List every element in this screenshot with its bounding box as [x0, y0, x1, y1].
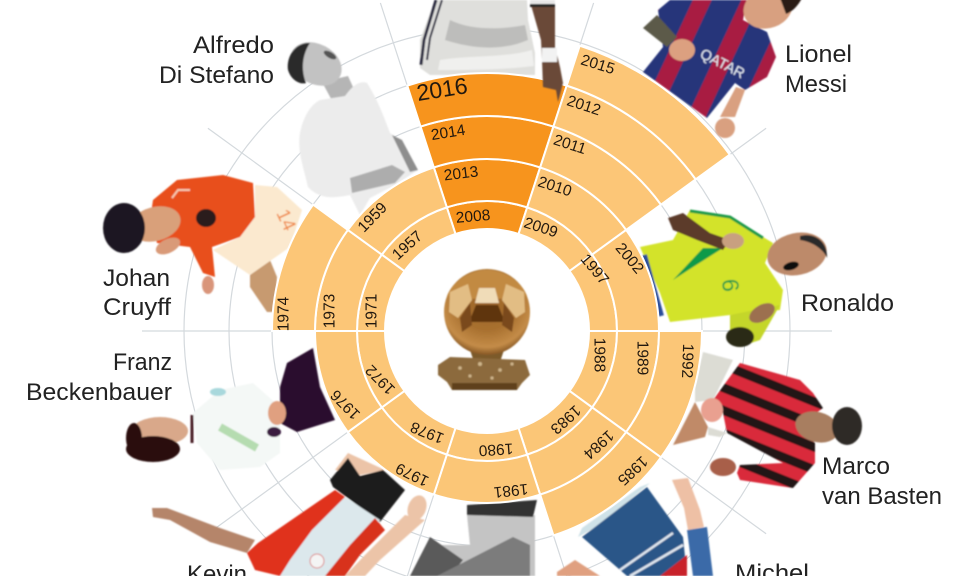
label: Franz Beckenbauer: Franz — [113, 349, 172, 376]
label: Marco van Basten: Marco — [822, 453, 890, 480]
player: Johan Cruyff — [103, 175, 302, 312]
sector: Di Stefano — [343, 161, 473, 284]
year labels: 1979 — [393, 459, 432, 489]
player: Lionel Messi: QATAR — [697, 46, 747, 82]
label: Lionel Messi: Lionel — [785, 41, 852, 68]
year labels: 1972 — [362, 361, 399, 398]
player: Marco van Basten — [673, 352, 862, 488]
label: Alfredo Di Stefano: Di Stefano — [159, 62, 274, 89]
sector: Cruyff — [262, 201, 415, 364]
label: Ronaldo: Ronaldo — [801, 290, 894, 317]
year labels: 1983 — [547, 401, 584, 437]
label: Johan Cruyff: Cruyff — [103, 294, 171, 321]
year labels: 1985 — [614, 452, 651, 488]
year labels: 2008 — [455, 207, 491, 227]
year labels: 1992 — [678, 343, 696, 378]
year labels: 2013 — [443, 163, 479, 184]
year labels: 1974 — [275, 296, 292, 331]
year labels: 1997 — [577, 251, 612, 288]
year labels: 1978 — [408, 418, 447, 446]
year labels: 2011 — [551, 132, 588, 158]
player: Johan Cruyff: 14 — [271, 206, 300, 235]
player: Michel Platini — [557, 478, 713, 576]
player hand overlapping the 2016 wedge — [530, 0, 563, 102]
player: Kevin Keegan — [152, 453, 430, 576]
player: Lionel Messi — [643, 0, 802, 138]
sector: Beckenbauer — [307, 310, 411, 435]
year labels: 2002 — [612, 240, 647, 277]
year labels: 1959 — [355, 199, 391, 236]
player: Cristiano Ronaldo — [420, 0, 535, 75]
year labels: 2015 — [579, 52, 617, 78]
year labels: 1988 — [591, 338, 608, 372]
year labels: 2010 — [536, 173, 574, 200]
year labels: 2009 — [522, 214, 560, 241]
sector: Keegan — [343, 378, 473, 501]
year labels: 1957 — [389, 228, 426, 264]
player: bottom winner (1980, 1981) — [410, 500, 537, 576]
player: Ronaldo — [640, 210, 831, 347]
wedge chart of award years — [262, 34, 738, 544]
player: Franz Beckenbauer — [126, 348, 335, 470]
background polar grid — [142, 3, 832, 576]
label: Franz Beckenbauer — [26, 349, 172, 406]
label: Lionel Messi: Messi — [785, 71, 847, 98]
label: Johan Cruyff — [103, 265, 171, 321]
icon: golden ball trophy — [438, 269, 530, 390]
year labels: 1973 — [321, 294, 338, 328]
sector: bottom winner — [434, 428, 540, 503]
sector: van Basten — [559, 298, 712, 461]
year labels — [275, 52, 696, 500]
label: Franz Beckenbauer: Beckenbauer — [26, 379, 172, 406]
year labels: 2016 — [415, 72, 469, 106]
year labels: 1984 — [580, 426, 617, 462]
year labels: 1981 — [493, 480, 529, 500]
year labels: 2012 — [565, 92, 603, 119]
player: Ronaldo: 9 — [717, 278, 744, 293]
sector: Messi — [469, 34, 738, 307]
sector: Cristiano Ronaldo — [407, 73, 567, 234]
year labels: 2014 — [430, 122, 467, 144]
label: Johan Cruyff: Johan — [103, 265, 170, 292]
label: Alfredo Di Stefano — [159, 32, 274, 89]
year labels: 1971 — [363, 294, 380, 328]
label: Alfredo Di Stefano: Alfredo — [193, 32, 274, 59]
year labels: 1976 — [327, 386, 364, 423]
label: Marco van Basten: van Basten — [822, 483, 942, 510]
year labels: 1980 — [478, 439, 514, 459]
label: Marco van Basten — [822, 453, 942, 510]
year labels: 1989 — [634, 341, 651, 375]
player: Alfredo Di Stefano — [283, 34, 418, 215]
sector: Platini — [490, 370, 667, 544]
label: Lionel Messi — [785, 41, 852, 98]
sector: Ronaldo — [563, 227, 667, 352]
